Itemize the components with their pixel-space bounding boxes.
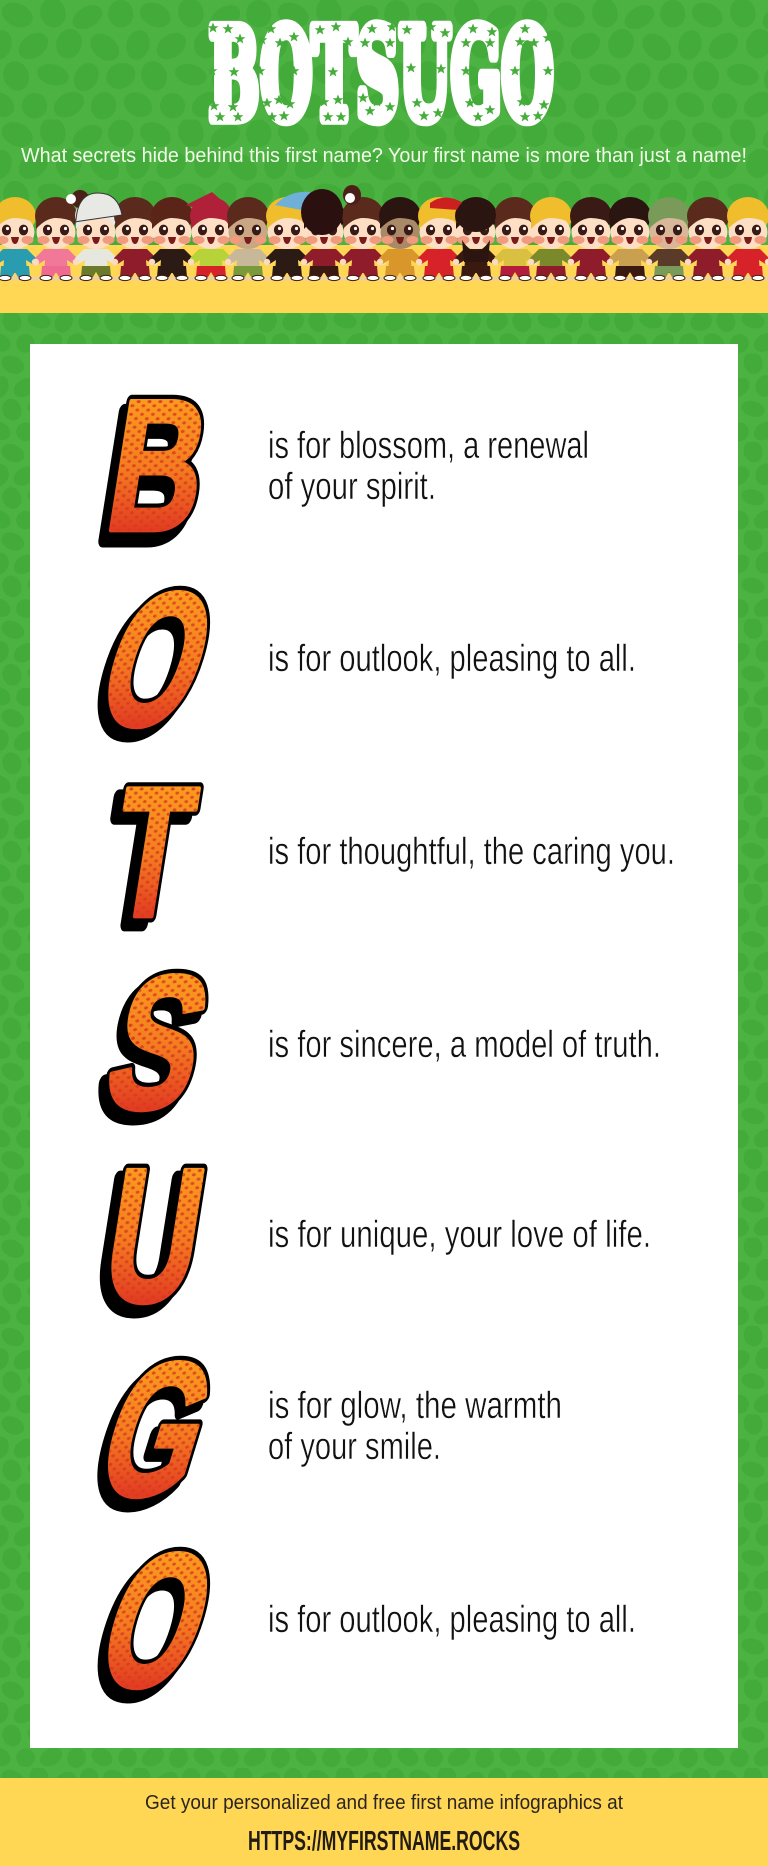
text: S meaning: is for sincere, a model of truth. bbox=[268, 1024, 661, 1066]
comic letter S: S bbox=[89, 938, 228, 1149]
text: G meaning: is for glow, the warmth bbox=[268, 1385, 562, 1427]
comic letter G: G bbox=[79, 1323, 237, 1536]
letter O row 2 bbox=[72, 1514, 636, 1735]
letter U row bbox=[85, 1130, 651, 1350]
letter B row bbox=[89, 362, 589, 581]
comic letter S: S bbox=[89, 938, 228, 1149]
title: BOTSUGO: BOTSUGO bbox=[209, 2, 553, 147]
comic letter O: O bbox=[72, 561, 230, 774]
text: B meaning: of your spirit. bbox=[268, 466, 436, 508]
text: B meaning: is for blossom, a renewal bbox=[268, 425, 589, 467]
comic letter S: S bbox=[82, 946, 221, 1157]
comic letter T: T bbox=[100, 750, 207, 956]
letter O row bbox=[72, 553, 636, 774]
footer url: HTTPS://MYFIRSTNAME.ROCKS bbox=[248, 1825, 520, 1856]
text: G meaning: of your smile. bbox=[268, 1426, 441, 1468]
letter G row bbox=[72, 1323, 562, 1544]
comic letter G: G bbox=[72, 1331, 230, 1544]
text: O meaning: is for outlook, pleasing to all. bbox=[268, 638, 636, 680]
footer bbox=[0, 1778, 768, 1866]
comic letter O: O bbox=[79, 553, 237, 766]
text: B meaning bbox=[268, 425, 589, 508]
comic letter T: T bbox=[91, 758, 198, 964]
comic letter G: G bbox=[79, 1323, 237, 1536]
comic letter O: O bbox=[79, 553, 237, 766]
text: U meaning: is for unique, your love of life. bbox=[268, 1214, 651, 1256]
comic letter U: U bbox=[93, 1130, 217, 1342]
comic letter T: T bbox=[100, 750, 207, 956]
panel: white card bbox=[30, 344, 738, 1748]
comic letter B: B bbox=[96, 362, 221, 571]
comic letter O: O bbox=[79, 1514, 237, 1727]
comic letter G: G bbox=[79, 1323, 237, 1536]
comic letter B: B bbox=[96, 362, 221, 571]
letter T row bbox=[91, 750, 675, 964]
comic letter O: O bbox=[79, 553, 237, 766]
letter S row bbox=[82, 938, 661, 1157]
comic letter O: O bbox=[79, 1514, 237, 1727]
comic letter U: U bbox=[93, 1130, 217, 1342]
comic letter O: O bbox=[72, 1522, 230, 1735]
comic letter O: O bbox=[79, 1514, 237, 1727]
comic letter S: S bbox=[89, 938, 228, 1149]
subtitle: What secrets hide behind this first name? Your first name is more than just a name! bbox=[21, 145, 747, 167]
yellow band bbox=[0, 245, 768, 313]
text: O meaning: is for outlook, pleasing to all. bbox=[268, 1599, 636, 1641]
comic letter B: B bbox=[96, 362, 221, 571]
illustration: row of children holding hands bbox=[0, 185, 768, 281]
comic letter U: U bbox=[85, 1138, 209, 1350]
comic letter B: B bbox=[89, 372, 214, 581]
comic letter U: U bbox=[93, 1130, 217, 1342]
comic letter T: T bbox=[100, 750, 207, 956]
text: G meaning bbox=[268, 1385, 562, 1468]
footer text: Get your personalized and free first name infographics at bbox=[145, 1792, 623, 1814]
